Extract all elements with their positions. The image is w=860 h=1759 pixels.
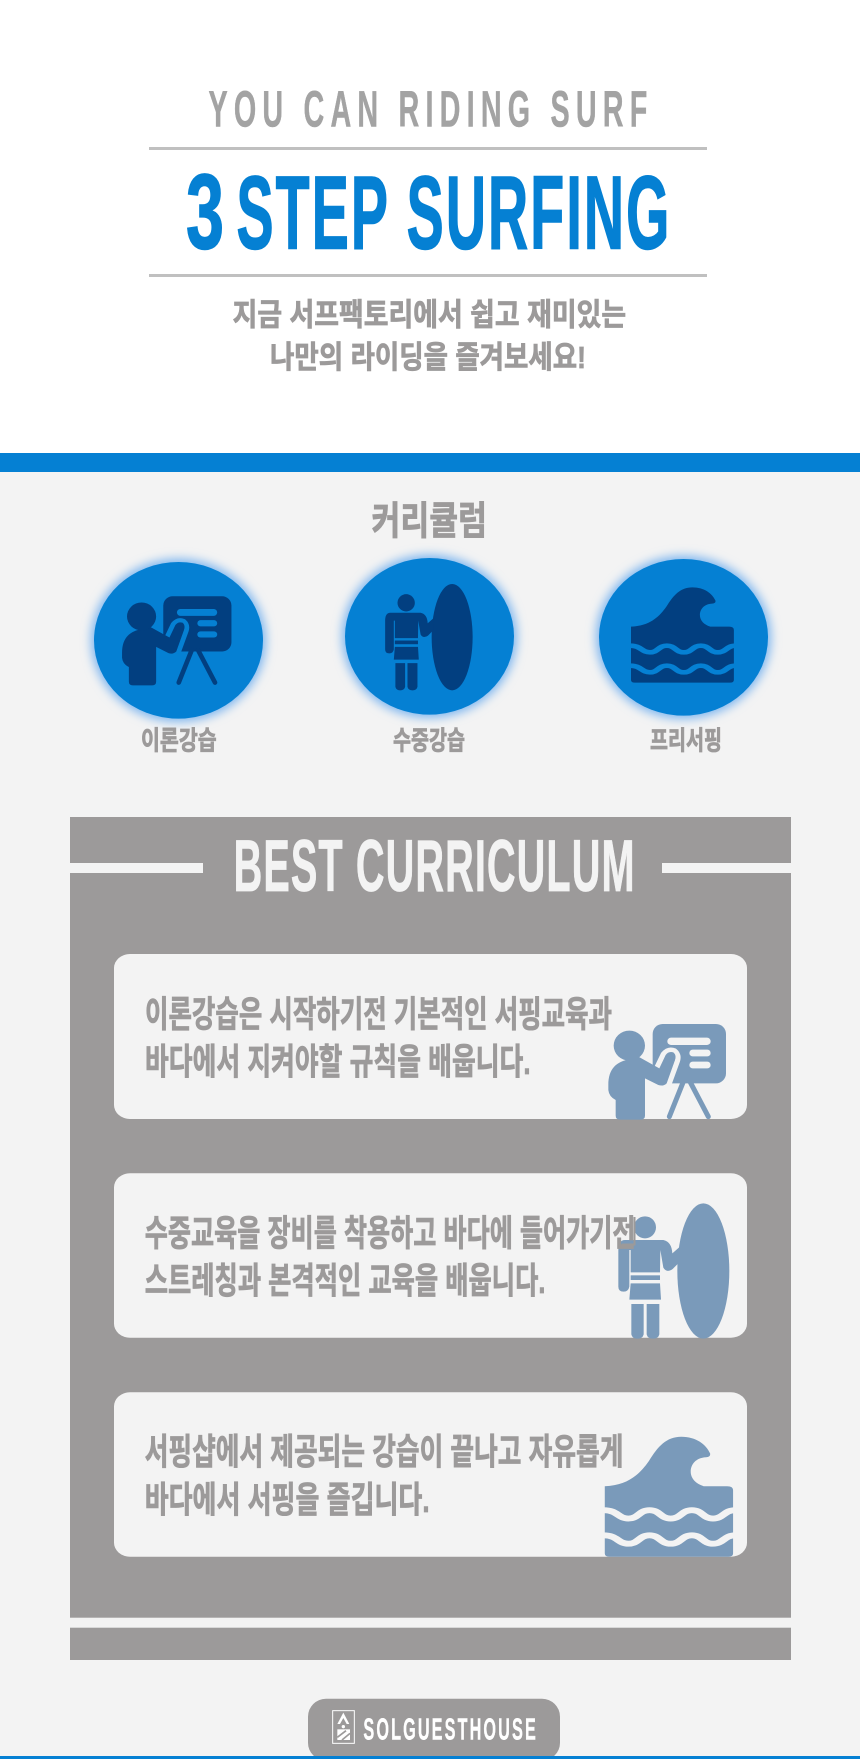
curriculum heading: 커리큘럼 (372, 500, 487, 544)
card 1 icon: instructor (608, 1024, 726, 1120)
card 1 text: 바다에서 지켜야할 규칙을 배웁니다. (145, 1041, 530, 1082)
curriculum icon: in-water lesson (342, 555, 517, 718)
subtitle: 지금 서프팩토리에서 쉽고 재미있는 (233, 298, 626, 332)
curriculum label: in-water: 수중강습 (393, 726, 465, 756)
card 2 text: 스트레칭과 본격적인 교육을 배웁니다. (145, 1260, 545, 1301)
card 3 text: 바다에서 서핑을 즐깁니다. (145, 1479, 430, 1520)
card 3: free surfing (114, 1392, 747, 1557)
subtitle (233, 298, 626, 375)
card 1 text (145, 994, 612, 1082)
card 1: theory lesson (114, 954, 747, 1120)
subtitle: 나만의 라이딩을 즐겨보세요! (270, 340, 586, 375)
panel: best curriculum (70, 817, 791, 1618)
blue divider band (0, 453, 860, 472)
card 2: in-water lesson (114, 1173, 747, 1339)
card 2 icon: surfer (618, 1203, 729, 1339)
card 3 text: 서핑샵에서 제공되는 강습이 끝나고 자유롭게 (145, 1431, 623, 1472)
card 1 text: 이론강습은 시작하기전 기본적인 서핑교육과 (145, 994, 612, 1034)
curriculum icon: theory lesson (91, 559, 266, 722)
curriculum icon: free surfing (596, 556, 771, 719)
card 3 icon: wave (604, 1437, 735, 1557)
title: 3 step surfing: 3 (186, 152, 224, 272)
card 2 text: 수중교육을 장비를 착용하고 바다에 들어가기전 (145, 1212, 636, 1254)
curriculum label: free surfing: 프리서핑 (650, 726, 722, 756)
logo mark (333, 1711, 354, 1743)
bottom blue line (0, 1756, 860, 1759)
card 3 text (145, 1431, 623, 1520)
curriculum label: theory: 이론강습 (141, 726, 217, 756)
header section (0, 0, 860, 453)
footer logo pill (308, 1699, 560, 1759)
lower grey bar (70, 1628, 791, 1660)
card 2 text (145, 1212, 636, 1301)
logo wordmark: SOLGUESTHOUSE (363, 1712, 538, 1746)
title: 3 step surfing (186, 152, 672, 272)
